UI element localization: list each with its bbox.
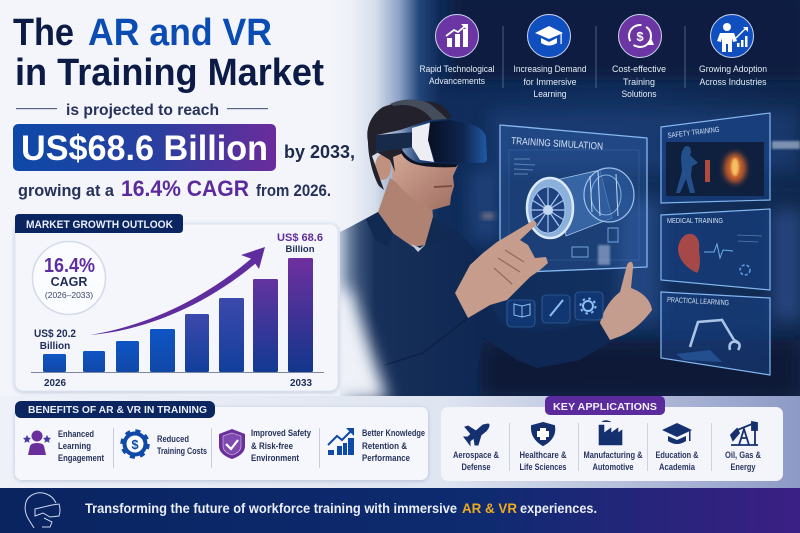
icon: cost gear [122, 431, 148, 457]
subtitle: is projected to reach: is projected to reach [66, 102, 219, 119]
label: aerospace [453, 450, 499, 472]
icon: healthcare [532, 423, 554, 445]
panel heading: BENEFITS OF AR & VR IN TRAINING [28, 405, 207, 416]
label: aerospace: Defense [462, 462, 490, 472]
footer tagline: Transforming the future of workforce training with immersive [85, 500, 457, 516]
driver: cost-effective training: Cost-effective [612, 64, 666, 74]
text: enhanced learning engagement: Engagement [58, 453, 104, 463]
axis labels: 2033 [290, 377, 312, 389]
man: ear [375, 154, 391, 180]
text: enhanced learning engagement [58, 429, 104, 463]
man: sideburn [376, 148, 403, 172]
label: oil and gas: Energy [730, 462, 756, 472]
end value label: Billion [285, 244, 315, 255]
CAGR badge: CAGR [51, 275, 87, 289]
robot arm [690, 320, 740, 350]
by 2033 text: by 2033, [284, 142, 355, 162]
text: improved safety [251, 428, 311, 463]
title: in Training Market [15, 52, 324, 94]
icon: plane [464, 424, 489, 445]
panel: key applications [441, 396, 783, 481]
start value label: Billion [40, 341, 70, 352]
headband [390, 100, 447, 120]
control glyphs [572, 228, 618, 257]
panel heading: KEY APPLICATIONS [553, 401, 657, 413]
driver: rapid technological advancements: Rapid Technological [420, 64, 494, 74]
dividers [114, 428, 320, 468]
CAGR sentence: growing at a [18, 182, 115, 200]
headline value pill: US$68.6 Billion [21, 129, 268, 168]
icon: engaged learner [23, 430, 51, 455]
far hand [600, 262, 652, 340]
icon: dollar cycle: $ [636, 29, 644, 44]
panel title: PRACTICAL LEARNING [667, 295, 729, 307]
label: education: Academia [659, 462, 696, 472]
label: oil and gas: Oil, Gas & [725, 450, 761, 460]
panel heading [545, 396, 665, 415]
title: AR and VR [88, 12, 272, 54]
training simulation panel [500, 125, 647, 273]
CAGR sentence [18, 176, 331, 201]
end value label [277, 232, 323, 255]
label: healthcare: Healthcare & [520, 450, 567, 460]
label: education: Education & [656, 450, 699, 460]
growth arrow [90, 247, 265, 335]
dividers [510, 423, 712, 471]
driver: immersive learning demand: Increasing Demand [514, 64, 586, 74]
icon: cost gear: $ [131, 437, 139, 452]
driver: rapid technological advancements [420, 14, 494, 86]
footer tagline: experiences. [520, 500, 597, 516]
man: body and arms [340, 212, 620, 396]
text: reduced training costs: Training Costs [157, 446, 207, 456]
white shell [412, 122, 434, 162]
panel heading [15, 214, 183, 233]
icon: graduation cap [535, 26, 563, 46]
icon: VR head outline [25, 493, 60, 528]
headset strap [376, 132, 415, 152]
text: better knowledge: Retention & [362, 441, 407, 451]
driver: cost-effective training [612, 14, 666, 99]
panel title: SAFETY TRAINING [667, 125, 720, 140]
driver: immersive learning demand [514, 14, 586, 99]
CAGR badge: 16.4% [44, 255, 95, 277]
man: mouth [434, 186, 452, 187]
driver: cost-effective training: Solutions [622, 89, 657, 99]
footer tagline: AR & VR [462, 500, 517, 516]
blurred factory background [450, 0, 800, 400]
panel title: TRAINING SIMULATION [511, 136, 603, 153]
headset [401, 120, 487, 167]
small tile: tools [542, 295, 570, 323]
CAGR sentence: 16.4% CAGR [121, 176, 249, 201]
text: improved safety: Environment [251, 453, 299, 463]
driver: growing adoption [699, 14, 767, 87]
man: sleeve edge [385, 318, 468, 365]
panel: benefits [15, 401, 428, 480]
photo: VR trainee with holographic panels [325, 0, 800, 400]
label: healthcare [520, 450, 567, 472]
panel inner frame [509, 150, 639, 260]
practical learning panel [661, 292, 770, 375]
icon: oil pump [731, 422, 758, 445]
icon: safety shield [219, 429, 245, 459]
small tile: gear [575, 292, 603, 320]
gasket [401, 150, 458, 167]
start value label [34, 328, 76, 352]
axis labels: 2026 [44, 377, 66, 389]
text: reduced training costs [157, 434, 207, 456]
driver: rapid technological advancements: Advancements [429, 76, 485, 86]
medical training panel [661, 209, 770, 290]
turbine engine [527, 168, 634, 238]
near hand [455, 220, 548, 318]
worker silhouette [676, 146, 698, 193]
man: hair [367, 101, 451, 190]
text: enhanced learning engagement: Enhanced [58, 429, 94, 439]
panel: market growth outlook [15, 214, 338, 391]
fire scene [666, 142, 764, 196]
small tile: book [507, 300, 535, 327]
text: better knowledge: Better Knowledge [362, 428, 425, 438]
man: face [392, 152, 458, 210]
CAGR badge: (2026–2033) [45, 290, 93, 300]
bar chart [31, 258, 324, 373]
heartbeat [704, 244, 733, 258]
driver: immersive learning demand: for Immersive [524, 77, 576, 87]
text: enhanced learning engagement: Learning [58, 441, 91, 451]
driver: growing adoption: Across Industries [700, 77, 767, 87]
icon: performance chart [328, 428, 354, 455]
lower background band [0, 396, 800, 488]
text: better knowledge: Performance [362, 453, 410, 463]
label: aerospace: Aerospace & [453, 450, 499, 460]
label: healthcare: Life Sciences [520, 462, 566, 472]
label: oil and gas [725, 450, 761, 472]
end value label: US$ 68.6 [277, 232, 323, 244]
panel title: MEDICAL TRAINING [667, 216, 723, 225]
shirt fade lower left [325, 290, 388, 400]
title: The [13, 12, 74, 54]
CAGR badge [32, 242, 106, 314]
text: better knowledge [362, 428, 425, 463]
man: undershirt [411, 244, 426, 252]
icon: graduation cap [662, 423, 692, 444]
footer band [0, 488, 800, 533]
driver: cost-effective training: Training [623, 77, 655, 87]
title [13, 12, 324, 94]
panel notes [514, 159, 535, 174]
text: reduced training costs: Reduced [157, 434, 189, 444]
label: manufacturing [584, 450, 643, 472]
panel heading [15, 401, 215, 418]
icon: rising chart [446, 24, 468, 47]
dark visor [428, 120, 487, 163]
heart [678, 234, 700, 273]
data marks [740, 265, 750, 275]
extinguisher [705, 160, 710, 182]
man: collar [366, 212, 447, 247]
axis labels [44, 377, 312, 389]
label: manufacturing: Automotive [592, 462, 634, 472]
driver: growing adoption: Growing Adoption [699, 64, 767, 74]
CAGR sentence: from 2026. [256, 182, 331, 200]
text: improved safety: Improved Safety [251, 428, 311, 438]
safety training panel [661, 113, 770, 203]
panel heading: MARKET GROWTH OUTLOOK [26, 219, 173, 231]
icon: person with chart [717, 23, 748, 52]
label: manufacturing: Manufacturing & [584, 450, 643, 460]
icon: factory [599, 420, 622, 445]
text: improved safety: & Risk-free [251, 441, 293, 451]
label: education [656, 450, 699, 472]
man: neck [378, 178, 433, 247]
driver: immersive learning demand: Learning [534, 89, 566, 99]
start value label: US$ 20.2 [34, 328, 76, 340]
